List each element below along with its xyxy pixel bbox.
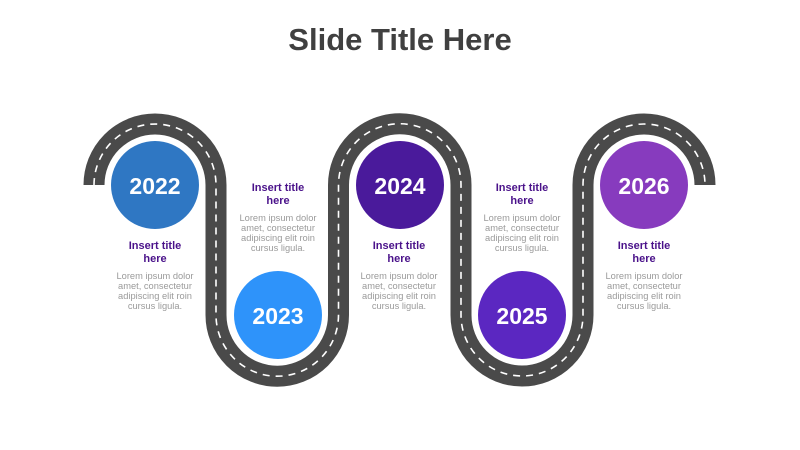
circle 2026 bbox=[600, 141, 688, 229]
text block 2022: Lorem ipsum dolor bbox=[116, 271, 194, 281]
text block 2024: Lorem ipsum dolor bbox=[360, 271, 438, 281]
text block 2025: Insert title bbox=[496, 182, 548, 194]
text block 2024 bbox=[360, 240, 438, 311]
text block 2026: Insert title bbox=[618, 240, 670, 252]
text block 2023: Lorem ipsum dolor bbox=[240, 213, 316, 223]
text block 2023 bbox=[240, 182, 316, 253]
text block 2026 bbox=[606, 240, 682, 311]
circle 2023: 2023 bbox=[252, 303, 304, 329]
text block 2025: Lorem ipsum dolor bbox=[484, 213, 560, 223]
text block 2024: cursus ligula. bbox=[372, 301, 426, 311]
circle 2023 bbox=[234, 271, 322, 359]
text block 2024: here bbox=[387, 252, 411, 264]
text block 2023: adipiscing elit roin bbox=[241, 233, 315, 243]
text block 2022: adipiscing elit roin bbox=[118, 291, 192, 301]
text block 2023: cursus ligula. bbox=[251, 243, 305, 253]
text block 2022: amet, consectetur bbox=[118, 281, 192, 291]
circle 2024: 2024 bbox=[374, 173, 426, 199]
text block 2022: Insert title bbox=[129, 240, 181, 252]
circle 2024 bbox=[356, 141, 444, 229]
text block 2025: adipiscing elit roin bbox=[485, 233, 559, 243]
text block 2026: Lorem ipsum dolor bbox=[606, 271, 682, 281]
text block 2022 bbox=[116, 240, 194, 311]
text block 2026: here bbox=[632, 252, 656, 264]
text block 2026: adipiscing elit roin bbox=[607, 291, 681, 301]
circle 2025 bbox=[478, 271, 566, 359]
text block 2024: Insert title bbox=[373, 240, 425, 252]
road bbox=[94, 124, 705, 376]
text block 2025 bbox=[484, 182, 560, 253]
circle 2022: 2022 bbox=[129, 173, 181, 199]
circle 2022 bbox=[111, 141, 199, 229]
text block 2025: here bbox=[510, 194, 534, 206]
text block 2025: cursus ligula. bbox=[495, 243, 549, 253]
title: Slide Title Here bbox=[288, 22, 512, 57]
circle 2025: 2025 bbox=[496, 303, 548, 329]
text block 2024: adipiscing elit roin bbox=[362, 291, 436, 301]
text block 2026: amet, consectetur bbox=[607, 281, 681, 291]
text block 2026: cursus ligula. bbox=[617, 301, 671, 311]
circle 2026: 2026 bbox=[618, 173, 670, 199]
text block 2023: Insert title bbox=[252, 182, 304, 194]
text block 2022: here bbox=[143, 252, 167, 264]
text block 2022: cursus ligula. bbox=[128, 301, 182, 311]
text block 2025: amet, consectetur bbox=[485, 223, 559, 233]
text block 2023: here bbox=[266, 194, 290, 206]
text block 2023: amet, consectetur bbox=[241, 223, 315, 233]
text block 2024: amet, consectetur bbox=[362, 281, 436, 291]
